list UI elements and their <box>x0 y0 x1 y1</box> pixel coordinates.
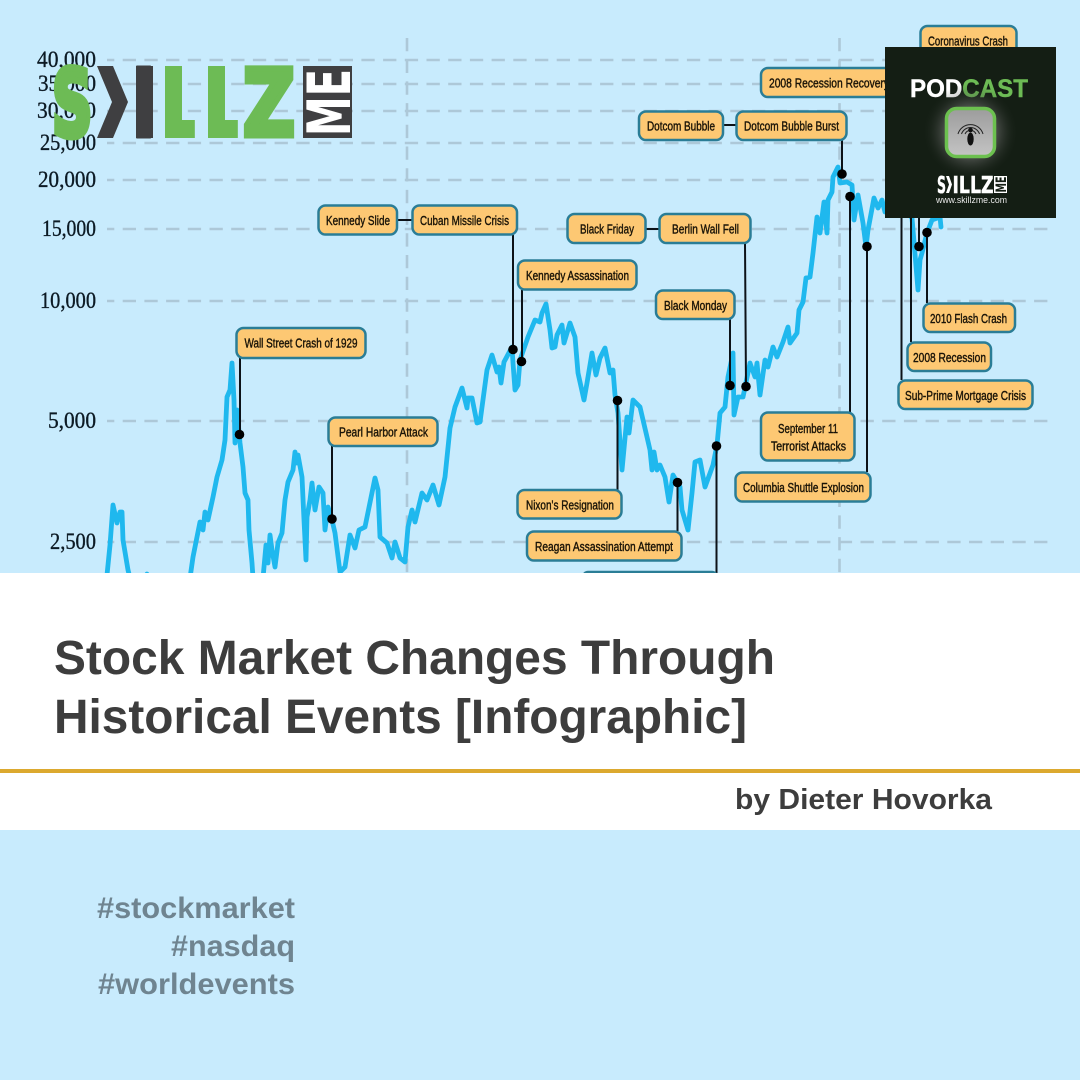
logo: SkillzMe: Z <box>243 51 295 158</box>
callout: Coronavirus Crash <box>920 26 1016 56</box>
callout: Dotcom Bubble Burst <box>736 112 846 140</box>
callout: Black Friday <box>568 214 646 243</box>
callout: September 11 Terrorist Attacks: Terrorist Attacks <box>771 438 846 454</box>
hashtags: #stockmarket <box>97 892 295 925</box>
title: Historical Events [Infographic] <box>54 691 747 744</box>
callout: 2008 Recession <box>908 342 991 371</box>
logo: SkillzMe: ME <box>295 69 365 136</box>
callout: Columbia Shuttle Explosion: Columbia Shuttle Explosion <box>743 480 864 495</box>
callout: Black Monday: Black Monday <box>664 298 727 313</box>
callout: 2010 Flash Crash <box>924 304 1015 332</box>
axis labels: 30,000 <box>37 98 96 123</box>
axis labels: 20,000 <box>38 167 96 192</box>
callout: Wall Street Crash of 1929 <box>236 328 366 358</box>
callout: 2008 Recession: 2008 Recession <box>913 350 986 365</box>
podcast heading: PODCAST <box>910 75 1028 103</box>
logo: SkillzMe <box>52 50 365 158</box>
axis labels: 5,000 <box>48 408 96 433</box>
callout: Sub-Prime Mortgage Crisis: Sub-Prime Mortgage Crisis <box>905 388 1026 403</box>
logo: SkillzMe: L <box>162 50 195 158</box>
callout: Sub-Prime Mortgage Crisis <box>898 380 1032 409</box>
callout: 2010 Flash Crash: 2010 Flash Crash <box>930 311 1007 326</box>
callout: Kennedy Slide: Kennedy Slide <box>326 213 390 228</box>
badge logo: ME <box>994 177 1010 192</box>
axis labels <box>37 47 96 554</box>
callout: Kennedy Slide <box>318 206 397 234</box>
panel: podcast badge <box>885 47 1056 218</box>
hashtags: #nasdaq <box>171 930 295 963</box>
logo: SkillzMe: I <box>133 51 154 158</box>
callout: Nixon's Resignation: Nixon's Resignation <box>526 498 614 512</box>
callout: Kennedy Assassination: Kennedy Assassination <box>526 268 629 283</box>
callout: Cuban Missile Crisis <box>412 206 517 234</box>
axis labels: 2,500 <box>50 529 96 554</box>
axis labels: 40,000 <box>37 47 96 72</box>
title: Stock Market Changes Through <box>54 632 775 685</box>
badge logo: ILLZ <box>952 173 994 199</box>
hashtags <box>97 892 295 1001</box>
callout: Reagan Assassination Attempt: Reagan Assassination Attempt <box>535 539 673 554</box>
callout: September 11 Terrorist Attacks: September 11 <box>778 421 838 436</box>
callout: Columbia Shuttle Explosion <box>736 472 870 502</box>
panel: title band <box>0 573 1080 830</box>
callout: Cuban Missile Crisis: Cuban Missile Crisis <box>420 213 509 228</box>
callout: Berlin Wall Fell: Berlin Wall Fell <box>672 222 739 236</box>
market index line <box>107 167 941 578</box>
callout: Coronavirus Crash: Coronavirus Crash <box>928 34 1008 48</box>
callout: Dotcom Bubble Burst: Dotcom Bubble Burst <box>744 118 839 134</box>
connector stems and event dots <box>235 125 932 573</box>
logo: SkillzMe: L <box>205 50 238 158</box>
axis labels: 15,000 <box>42 216 96 241</box>
callout: Reagan Assassination Attempt <box>527 532 682 560</box>
callout: Nixon's Resignation <box>518 490 622 518</box>
badge logo: S <box>937 173 946 199</box>
axis labels: 10,000 <box>40 288 96 313</box>
callout: September 11 Terrorist Attacks <box>761 412 854 460</box>
byline: by Dieter Hovorka <box>735 784 993 816</box>
callout: 2008 Recession Recovery <box>761 68 896 97</box>
callout: Wall Street Crash of 1929: Wall Street Crash of 1929 <box>244 336 358 350</box>
axis labels: 25,000 <box>40 130 96 155</box>
callout: cropped event box at panel edge <box>583 572 717 602</box>
logo: SkillzMe: S <box>52 50 92 157</box>
callout: Pearl Harbor Attack: Pearl Harbor Attack <box>339 424 428 440</box>
callout: Berlin Wall Fell <box>660 214 750 243</box>
callout: 2008 Recession Recovery: 2008 Recession Recovery <box>769 76 889 90</box>
callout: Dotcom Bubble <box>639 112 723 140</box>
axis labels: 35,000 <box>38 71 96 96</box>
callout: Pearl Harbor Attack <box>328 418 438 446</box>
badge url: www.skillzme.com <box>935 195 1007 205</box>
hashtags: #worldevents <box>98 968 295 1001</box>
callout: Black Friday: Black Friday <box>580 222 634 236</box>
callout: Black Monday <box>656 290 734 319</box>
title <box>54 632 775 744</box>
callout: Kennedy Assassination <box>518 260 636 290</box>
icon: podcast button <box>922 84 1018 180</box>
callout: Dotcom Bubble: Dotcom Bubble <box>647 118 715 134</box>
line chart: stock market through history <box>37 38 1050 578</box>
